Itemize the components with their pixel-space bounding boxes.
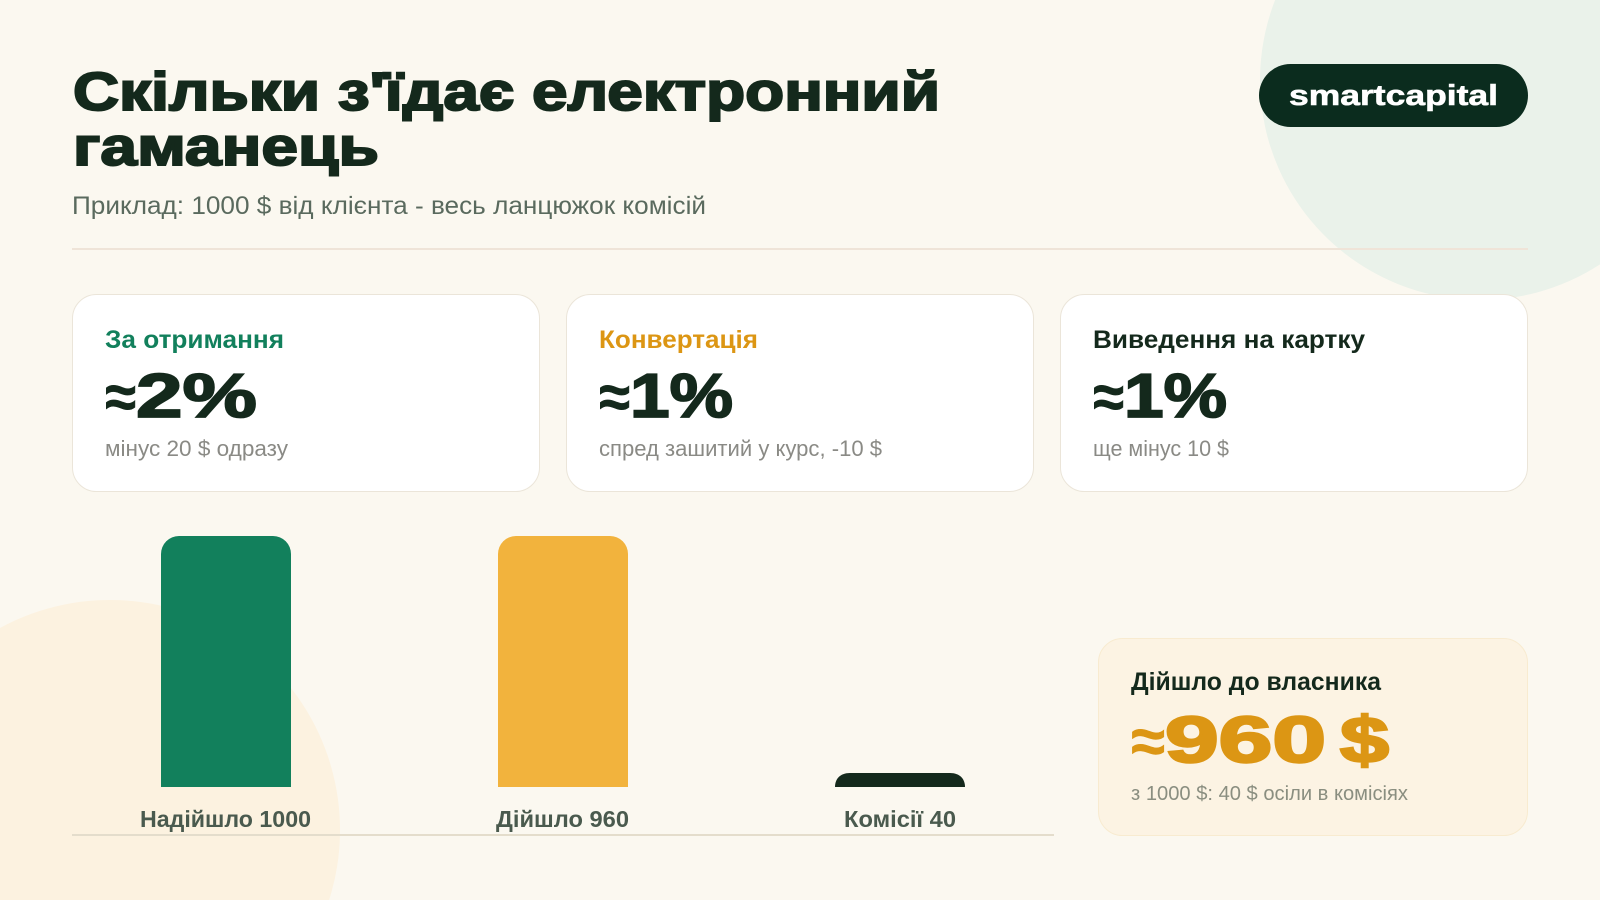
callout label: Дійшло до власника [1131, 668, 1382, 696]
bar: fees 40 [835, 773, 965, 832]
card value [599, 362, 733, 432]
card label: Конвертація [599, 326, 758, 354]
bar: received 1000: Надійшло 1000 [140, 806, 311, 832]
card value: ≈ [1093, 363, 1124, 432]
title [73, 62, 940, 177]
background circle: top right [1260, 0, 1600, 300]
bar: delivered 960: Дійшло 960 [496, 806, 629, 832]
card value: 1% [630, 362, 733, 431]
card value: ≈ [105, 363, 136, 432]
callout note: з 1000 $: 40 $ осіли в комісіях [1131, 783, 1408, 805]
panel: receiving fee [72, 294, 540, 492]
background circle: bottom left [0, 600, 340, 900]
card value: ≈ [599, 363, 630, 432]
card value [105, 362, 257, 432]
card value: 1% [1124, 362, 1227, 431]
title: Скільки з'їдає електронний [73, 62, 940, 122]
callout value: $ [1340, 703, 1389, 776]
header [72, 62, 940, 220]
card label: За отримання [105, 326, 284, 354]
brand pill [1259, 64, 1528, 127]
bar: received 1000 [140, 536, 311, 832]
subtitle: Приклад: 1000 $ від клієнта - весь ланцюжок комісій [72, 192, 706, 220]
title: гаманець [73, 117, 379, 177]
card note: ще мінус 10 $ [1093, 436, 1229, 461]
card note: мінус 20 $ одразу [105, 436, 288, 461]
callout value: 960 [1165, 703, 1326, 776]
callout value [1131, 703, 1389, 777]
brand pill: smartcapital [1289, 80, 1498, 112]
card value: 2% [136, 362, 257, 431]
callout value: ≈ [1131, 705, 1165, 777]
bar chart [72, 536, 1054, 836]
bar: delivered 960 [496, 536, 629, 832]
panel: amount delivered to owner [1098, 638, 1528, 836]
card value [1093, 362, 1227, 432]
panel: card withdrawal fee [1060, 294, 1528, 492]
card label: Виведення на картку [1093, 326, 1365, 354]
card note: спред зашитий у курс, -10 $ [599, 436, 882, 461]
panel: conversion fee [566, 294, 1034, 492]
bar: fees 40: Комісії 40 [844, 806, 956, 832]
